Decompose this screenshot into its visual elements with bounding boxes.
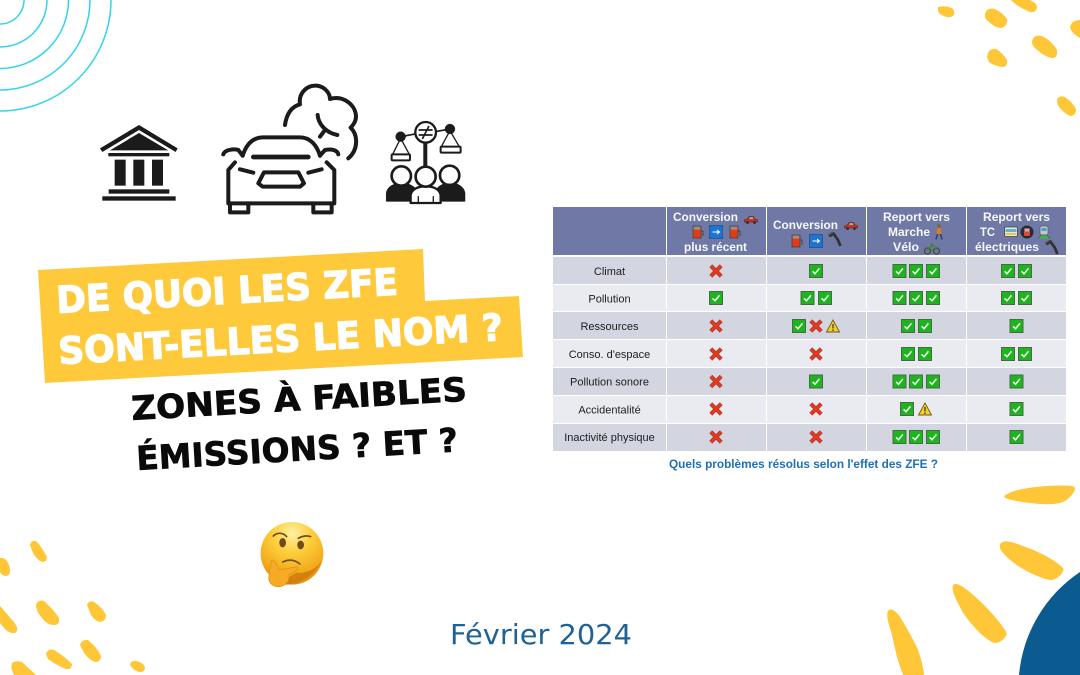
table header row: TC bbox=[980, 227, 995, 239]
row: Ressources marks bbox=[711, 320, 1023, 332]
table header row: Report vers bbox=[883, 212, 950, 224]
table header row: électriques bbox=[975, 242, 1039, 254]
subtitle: black question bbox=[130, 369, 468, 478]
panel: comparison table bbox=[553, 207, 1066, 471]
table row labels: Pollution bbox=[588, 294, 631, 306]
row: Conso. d'espace marks bbox=[711, 348, 1032, 360]
title banner: yellow background bbox=[38, 249, 523, 383]
table header row: Conversion bbox=[773, 220, 838, 232]
decorative dashes: top-right yellow bbox=[938, 0, 1080, 116]
table row backgrounds bbox=[553, 257, 1066, 451]
row: Pollution sonore marks bbox=[711, 375, 1023, 388]
table header row: plus récent bbox=[684, 242, 747, 254]
table row labels: Inactivité physique bbox=[564, 432, 655, 444]
decorative shapes: bottom-right yellow petals bbox=[887, 486, 1075, 675]
table header row: Conversion bbox=[673, 212, 738, 224]
table header row: Report vers bbox=[983, 212, 1050, 224]
icon: institution building bbox=[100, 125, 178, 201]
title: white headline bbox=[55, 261, 504, 373]
title: white headline: DE QUOI LES ZFE bbox=[55, 261, 399, 322]
subtitle: black question: ÉMISSIONS ? ET ? bbox=[135, 420, 459, 478]
table caption: Quels problèmes résolus selon l'effet des ZFE ? bbox=[669, 459, 938, 471]
row: Accidentalite marks bbox=[711, 402, 1023, 416]
table row labels bbox=[564, 266, 655, 444]
row: Inactivite physique marks bbox=[711, 430, 1023, 444]
row: Pollution marks bbox=[710, 292, 1032, 304]
table header row: Vélo bbox=[893, 242, 919, 254]
decorative arcs: top-left cyan bbox=[0, 0, 111, 111]
title: white headline: SONT-ELLES LE NOM ? bbox=[57, 306, 504, 373]
table header row: Marche bbox=[888, 227, 930, 239]
row: Climat marks bbox=[711, 264, 1032, 278]
table header row bbox=[553, 207, 1066, 255]
table row labels: Pollution sonore bbox=[570, 376, 649, 388]
icon: car with exhaust cloud bbox=[223, 86, 356, 212]
table row labels: Conso. d'espace bbox=[569, 349, 650, 361]
decorative dashes: bottom-left yellow bbox=[0, 541, 145, 675]
icon: scales and citizens bbox=[387, 122, 465, 203]
date label: Février 2024 bbox=[450, 618, 632, 651]
table row labels: Climat bbox=[594, 266, 625, 278]
decorative quarter circle: bottom-right blue bbox=[1019, 572, 1080, 675]
table row labels: Ressources bbox=[580, 321, 639, 333]
icon: thinking face emoji bbox=[261, 522, 323, 587]
table row labels: Accidentalité bbox=[578, 404, 641, 416]
subtitle: black question: ZONES À FAIBLES bbox=[130, 369, 468, 428]
